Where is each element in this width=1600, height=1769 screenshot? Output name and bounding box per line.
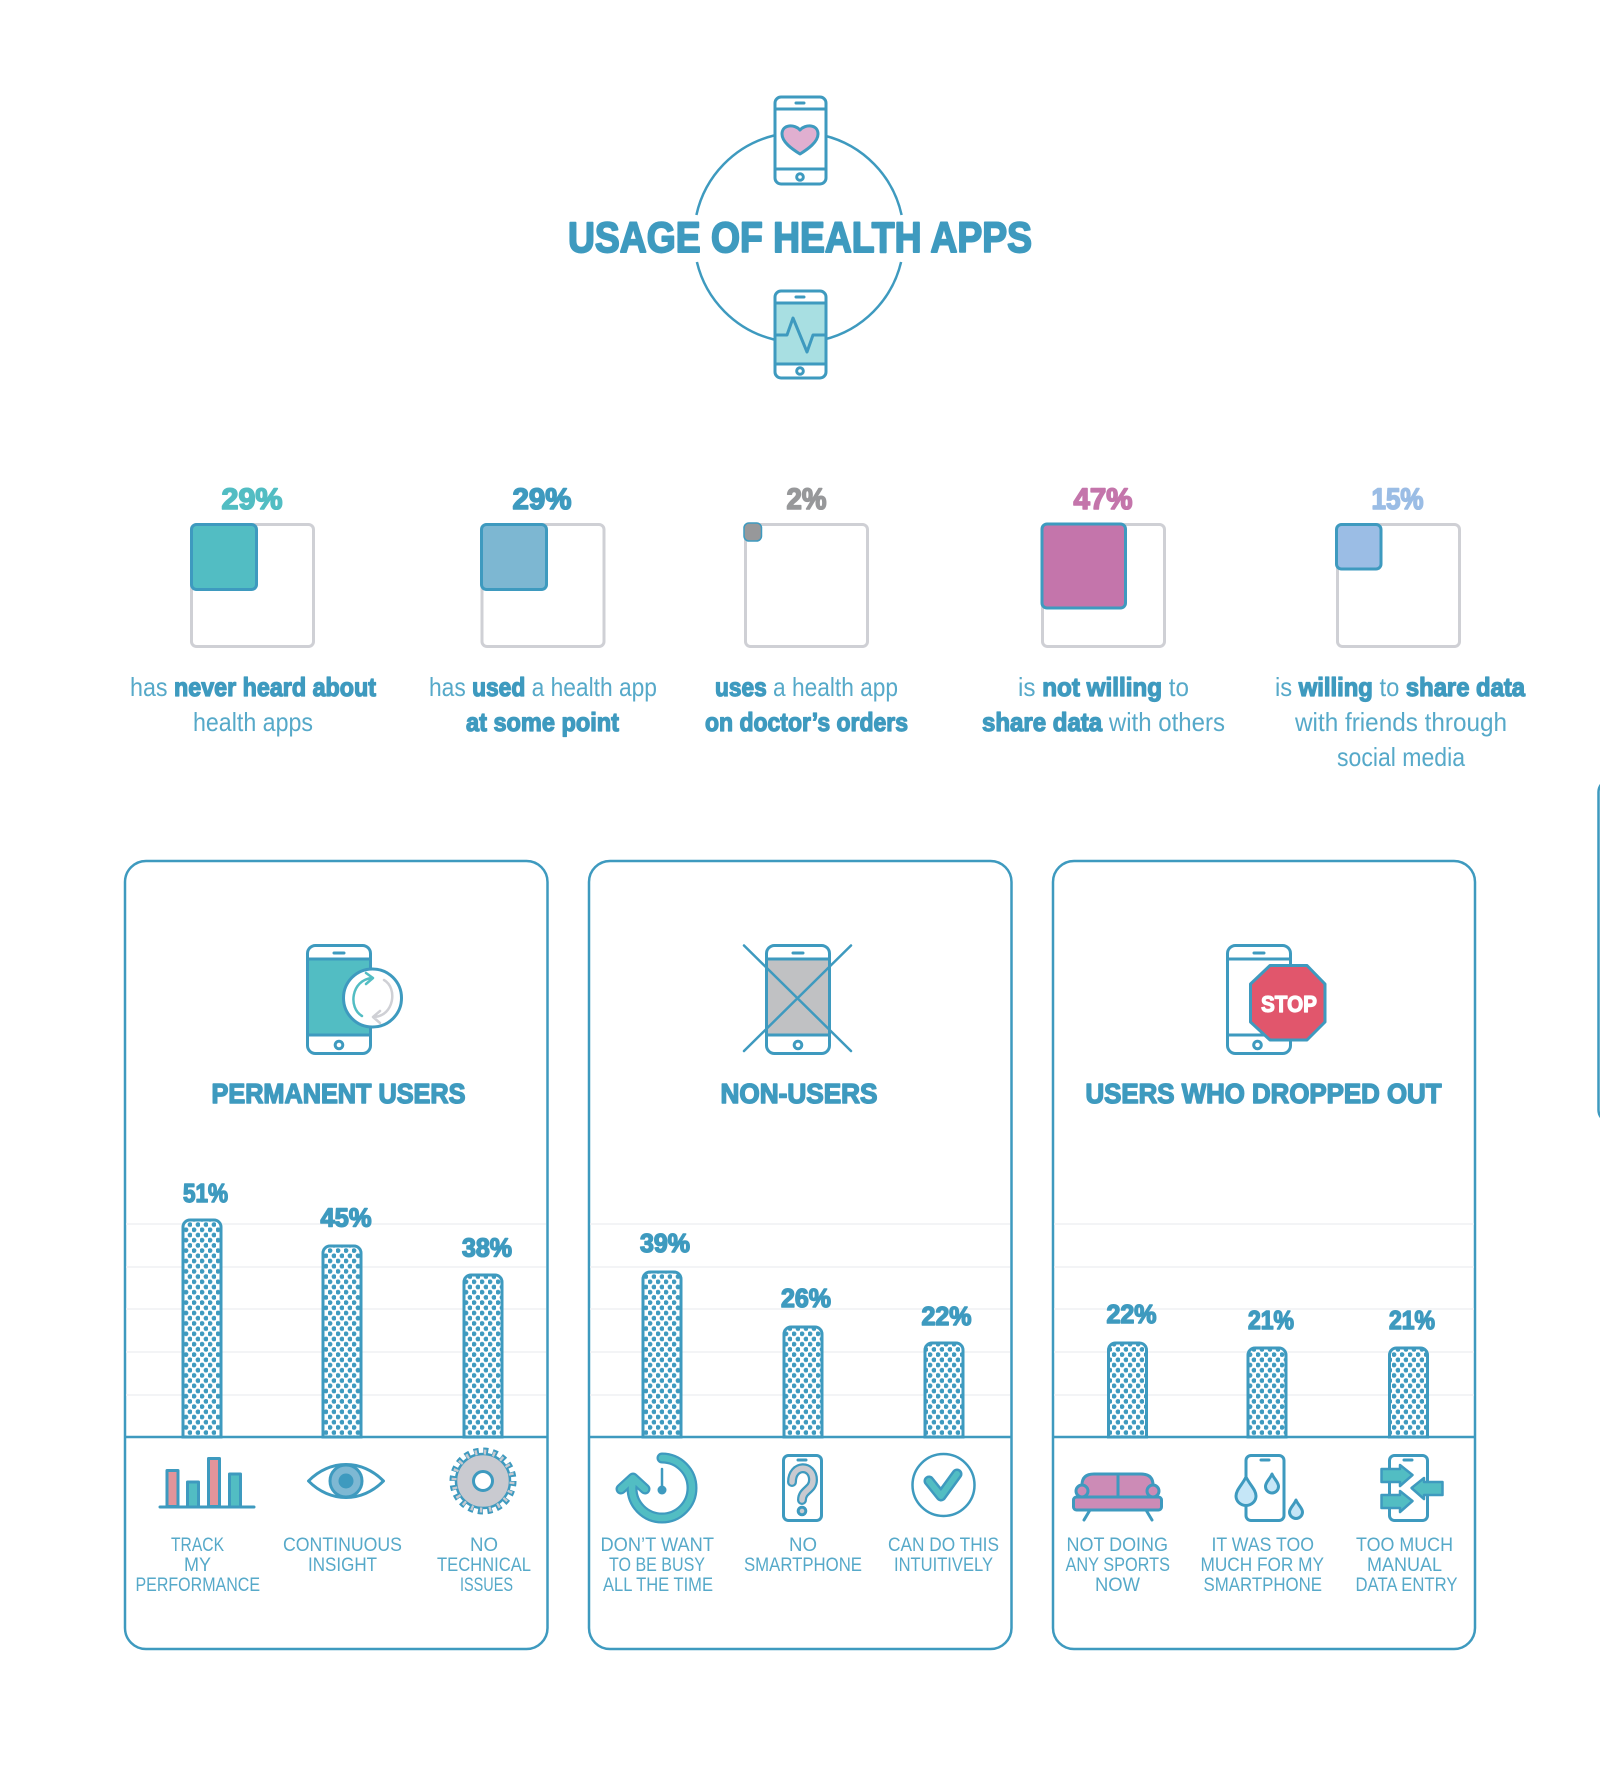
icon: check mark [912,1454,974,1516]
description: health apps [193,707,313,737]
label: no technical issues: TECHNICAL [437,1554,531,1576]
panel frame [1053,861,1475,1649]
circle ring [696,136,902,340]
label: too much for my smartphone: MUCH FOR MY [1200,1554,1324,1576]
icon: performance chart [160,1458,254,1507]
heading: NON-USERS [720,1078,878,1109]
stat: never heard about [130,483,376,737]
stat: willing to share [1275,483,1525,772]
stat: used at some point [429,483,657,737]
label: continuous insight: INSIGHT [308,1554,377,1576]
bar chart [1106,1299,1435,1437]
label: no smartphone: NO [789,1534,817,1556]
panel frame [125,861,548,1649]
description: on doctor’s orders [705,707,908,737]
icon: phone with water drops [1236,1456,1302,1520]
bar 21% [1248,1305,1294,1437]
bar 21% [1389,1305,1435,1437]
label: no technical issues [437,1534,531,1596]
label: continuous insight [283,1534,402,1576]
label: not doing any sports now [1066,1534,1170,1596]
icon: phone with question mark [784,1456,822,1520]
bar 45%: 45% [320,1202,372,1232]
icon: phone with stop sign [1228,946,1325,1054]
label: too much manual data entry [1356,1534,1458,1596]
proportion square [192,524,314,646]
bar 38% [462,1232,512,1437]
panel: non-users [589,861,1012,1649]
icon: timer with back arrow [621,1458,692,1518]
label: too much manual data entry: DATA ENTRY [1356,1574,1458,1596]
bar 22% [922,1301,972,1437]
icon: phone with stop sign: STOP [1261,991,1317,1017]
title: USAGE OF HEALTH APPS [568,214,1032,262]
label: track my performance [136,1534,260,1596]
proportion square [744,523,868,646]
bar 38%: 38% [462,1232,512,1262]
description [1275,672,1525,772]
description: is willing to share data [1275,672,1525,702]
bar chart [640,1228,972,1437]
description: social media [1337,742,1465,772]
description: uses a health app [715,672,898,702]
label: not doing any sports now: NOT DOING [1066,1534,1168,1556]
bar 22%: 22% [1106,1299,1156,1329]
bar 26% [781,1283,831,1437]
percentage 29%: 29% [512,483,572,516]
header emblem [696,97,902,378]
label: can do this intuitively: INTUITIVELY [894,1554,993,1576]
description: has used a health app [429,672,657,702]
label: don't want to be busy: DON’T WANT [600,1534,714,1556]
label: track my performance: PERFORMANCE [136,1574,260,1596]
icon: phone with data arrows [1382,1456,1442,1520]
label: no smartphone: SMARTPHONE [744,1554,862,1576]
label: too much manual data entry: MANUAL [1367,1554,1442,1576]
description: is not willing to [1018,672,1189,702]
percentage 29%: 29% [222,483,282,516]
icon: crossed-out phone [744,946,851,1054]
description [982,672,1225,737]
label: don't want to be busy: TO BE BUSY [609,1554,705,1576]
bar 21%: 21% [1389,1305,1435,1335]
proportion square [1336,524,1460,646]
icon: phone with pulse [775,291,826,378]
proportion square [482,524,604,646]
stat: not willing to share [982,483,1225,737]
label: no technical issues: NO [470,1534,498,1556]
icon: sofa [1074,1474,1162,1520]
bar 22%: 22% [922,1301,972,1331]
label: no smartphone [744,1534,862,1576]
bar 51% [183,1178,228,1437]
icon: gear [453,1451,513,1511]
bar 51%: 51% [183,1178,228,1208]
label: don't want to be busy: ALL THE TIME [603,1574,713,1596]
panel edge at right border [1598,780,1600,1122]
icon: phone with refresh [308,946,402,1054]
description: at some point [466,707,619,737]
label: not doing any sports now: NOW [1095,1574,1141,1596]
percentage 2%: 2% [786,483,826,516]
bar chart [183,1178,512,1437]
bar 22% [1106,1299,1156,1437]
label: too much manual data entry: TOO MUCH [1356,1534,1453,1556]
icon: eye [308,1464,384,1498]
bar 39% [640,1228,690,1437]
panel: permanent users [125,861,548,1649]
label: track my performance: TRACK [171,1534,224,1556]
description [705,672,908,737]
label: can do this intuitively [888,1534,999,1576]
stat: doctor's orders [705,483,908,737]
label: too much for my smartphone: SMARTPHONE [1204,1574,1322,1596]
label: no technical issues: ISSUES [460,1574,513,1596]
description: share data with others [982,707,1225,737]
description [429,672,657,737]
percentage 47%: 47% [1074,483,1132,516]
panel frame [589,861,1012,1649]
panel: users who dropped out [1053,861,1475,1649]
label: don't want to be busy [600,1534,714,1596]
bar 26%: 26% [781,1283,831,1313]
description: with friends through [1294,707,1507,737]
label: not doing any sports now: ANY SPORTS [1066,1554,1170,1576]
description [130,672,376,737]
bar 39%: 39% [640,1228,690,1258]
label: track my performance: MY [184,1554,211,1576]
percentage 15%: 15% [1372,483,1424,516]
description: has never heard about [130,672,376,702]
label: continuous insight: CONTINUOUS [283,1534,402,1556]
proportion square [1042,524,1164,646]
label: too much for my smartphone [1200,1534,1324,1596]
heading: USERS WHO DROPPED OUT [1086,1078,1442,1109]
bar 21%: 21% [1248,1305,1294,1335]
label: can do this intuitively: CAN DO THIS [888,1534,999,1556]
heading: PERMANENT USERS [212,1078,466,1109]
bar 45% [320,1202,372,1437]
label: too much for my smartphone: IT WAS TOO [1212,1534,1314,1556]
icon: phone with heart [775,97,826,184]
